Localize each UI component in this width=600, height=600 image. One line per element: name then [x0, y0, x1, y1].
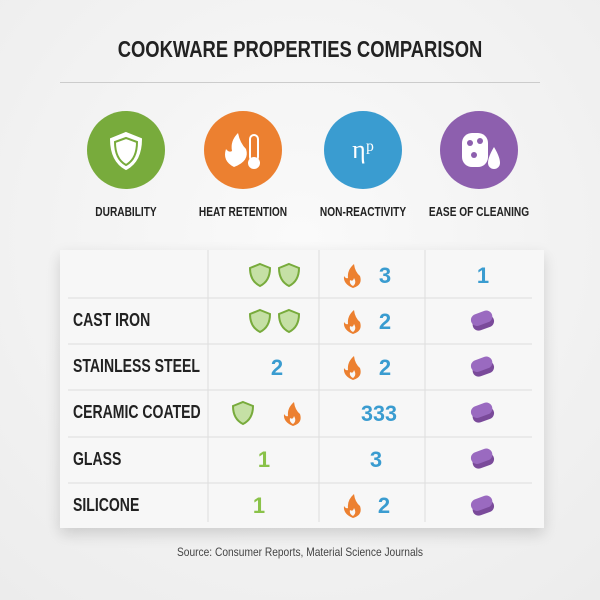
text: GLASS	[73, 449, 121, 469]
icon: non-reactivity	[324, 111, 402, 189]
panel: table: 3	[379, 263, 391, 288]
panel: table: 1	[477, 263, 489, 288]
title: COOKWARE PROPERTIES COMPARISON	[118, 36, 482, 62]
panel: table: 2	[271, 355, 283, 380]
icon: non-reactivity: ηᵖ	[352, 135, 374, 164]
row labels: CAST IRON	[73, 310, 150, 330]
panel: table: 2	[379, 355, 391, 380]
panel: table: 2	[379, 309, 391, 334]
text: CERAMIC COATED	[73, 402, 201, 422]
panel: table: 1	[253, 493, 265, 518]
panel: table: 333	[361, 401, 397, 426]
panel: table: 2	[378, 493, 390, 518]
icon: ease of cleaning	[440, 111, 518, 189]
text: HEAT RETENTION	[199, 204, 287, 219]
text: EASE OF CLEANING	[429, 204, 529, 219]
source: Source: Consumer Reports, Material Science Journals	[177, 545, 423, 559]
text: NON-REACTIVITY	[320, 204, 406, 219]
panel: table: 1	[258, 447, 270, 472]
icon: durability	[87, 111, 165, 189]
panel: table	[60, 250, 544, 528]
labels: DURABILITY	[95, 204, 157, 219]
panel: table: 3	[370, 447, 382, 472]
text: STAINLESS STEEL	[73, 356, 200, 376]
icon: heat retention	[204, 111, 282, 189]
text: SILICONE	[73, 495, 139, 515]
